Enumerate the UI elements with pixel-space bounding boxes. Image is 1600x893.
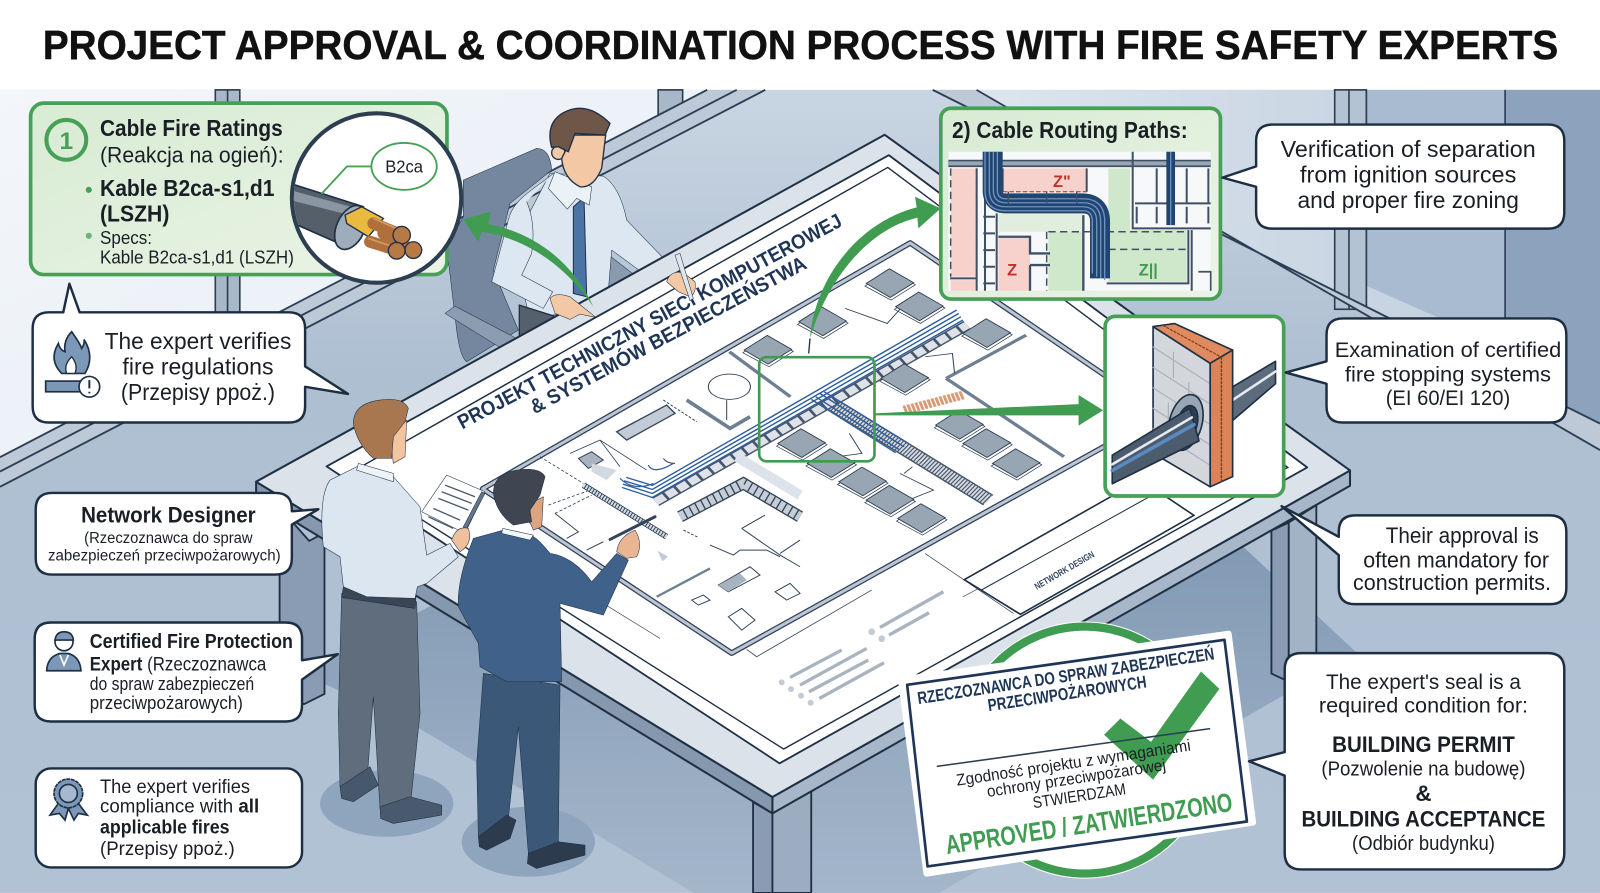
callout: seal required: (Pozwolenie na budowę) — [1321, 759, 1526, 781]
callout: examination of fire stopping — [1286, 318, 1566, 423]
panel: cable routing paths: 2) Cable Routing Paths: — [952, 117, 1188, 143]
lower legend bars — [747, 590, 943, 706]
callout text — [100, 776, 259, 860]
tie — [573, 197, 587, 297]
callout: verification of separation: Verification of separation — [1281, 136, 1536, 162]
cable ratings text: Specs: — [100, 227, 152, 248]
callout: network designer — [36, 493, 318, 575]
callout: seal required: required condition for: — [1319, 693, 1528, 717]
callout text: (Przepisy ppoż.) — [100, 838, 235, 860]
check mark — [1104, 672, 1219, 780]
shirt torso — [510, 173, 672, 320]
cable ratings text — [86, 115, 294, 267]
callout: expert verifies compliance — [36, 768, 302, 867]
callout: verification of separation: from ignition sources — [1300, 162, 1516, 188]
stamp text: APPROVED / ZATWIERDZONO — [943, 787, 1234, 860]
shirt left arm — [492, 173, 553, 308]
stamp text — [916, 643, 1234, 860]
table top — [256, 135, 1350, 813]
label: B2ca: B2ca — [385, 157, 423, 177]
seated man and chair — [445, 108, 672, 362]
callout: approval mandatory: often mandatory for — [1363, 547, 1549, 572]
callout: approval mandatory: construction permits. — [1353, 570, 1551, 595]
stamp text: Zgodność projektu z wymaganiami — [955, 737, 1192, 790]
title block — [964, 480, 1194, 614]
callout: examination of fire stopping: (EI 60/EI 120) — [1386, 386, 1510, 410]
callout: seal required: & — [1415, 781, 1432, 806]
callout text: Certified Fire Protection — [90, 631, 293, 653]
icon: expert in hard hat — [47, 632, 81, 671]
chair — [445, 148, 637, 362]
standing men — [320, 399, 655, 877]
callout text: do spraw zabezpieczeń — [90, 673, 254, 694]
title band — [0, 0, 1600, 90]
icon: cable magnifier — [290, 113, 461, 283]
cable ratings text: Kable B2ca-s1,d1 — [100, 175, 275, 201]
callout: approval mandatory: Their approval is — [1386, 523, 1539, 548]
callout text — [90, 631, 293, 713]
callout text: The expert verifies — [105, 328, 291, 354]
zone labels: Z" — [1053, 173, 1071, 191]
callout text — [105, 328, 291, 405]
zone labels: Z — [1007, 262, 1017, 280]
callout: verification of separation — [1222, 125, 1564, 229]
callout: verification of separation: and proper fire zoning — [1297, 187, 1519, 213]
workstations — [743, 269, 1042, 535]
floor plan frame — [483, 243, 1162, 653]
callout: examination of fire stopping: Examination of certified — [1335, 338, 1561, 362]
callout text: applicable fires — [100, 817, 230, 839]
callout: network designer: (Rzeczoznawca do spraw — [84, 530, 253, 547]
panel: cable fire ratings — [31, 103, 447, 275]
callout: seal required — [1249, 653, 1564, 869]
approval stamp — [901, 624, 1253, 877]
callout: seal required: BUILDING ACCEPTANCE — [1302, 807, 1545, 832]
title block: NETWORK DESIGN — [1033, 549, 1096, 592]
man in suit — [458, 469, 655, 868]
zone labels: Z|| — [1139, 262, 1158, 280]
callout: approval mandatory — [1282, 506, 1566, 604]
icon: medal — [50, 779, 87, 820]
callout text: Expert (Rzeczoznawca — [90, 653, 267, 675]
callout text: compliance with all — [100, 795, 259, 817]
cable ratings text: (Reakcja na ogień): — [100, 142, 284, 167]
stamp text: RZECZOZNAWCA DO SPRAW ZABEZPIECZEŃ — [916, 643, 1216, 708]
callout: network designer: Network Designer — [81, 503, 256, 528]
cable ratings text: Cable Fire Ratings — [100, 115, 283, 141]
hair and face — [550, 108, 610, 187]
arrow: plan to fire stopping — [874, 395, 1103, 426]
trousers — [519, 305, 558, 337]
cable ratings text: Kable B2ca-s1,d1 (LSZH) — [100, 246, 294, 267]
floor shadows — [320, 770, 595, 877]
blueprint title: PROJEKT TECHNICZNY SIECI KOMPUTEROWEJ — [454, 210, 846, 434]
callout: expert verifies fire regulations — [33, 284, 348, 423]
zone labels — [1007, 173, 1158, 280]
callout: examination of fire stopping: fire stopping systems — [1345, 363, 1551, 387]
blueprint title: & SYSTEMÓW BEZPIECZEŃSTWA — [526, 251, 811, 419]
table legs — [280, 505, 1316, 893]
cable trays — [622, 310, 988, 502]
callout text: fire regulations — [122, 354, 273, 380]
arrow: plan to routing paths — [809, 197, 941, 353]
step number 1 — [46, 120, 86, 160]
callout text: The expert verifies — [100, 776, 250, 798]
callout: certified fire protection expert — [35, 623, 338, 722]
panel: fire stopping detail — [1105, 316, 1284, 496]
man in shirt — [322, 399, 485, 823]
panel: cable routing paths — [941, 108, 1220, 299]
floor plan right side — [622, 269, 1077, 613]
blueprint sheet — [327, 155, 1307, 763]
callout: seal required: (Odbiór budynku) — [1352, 833, 1495, 855]
icon: flame and warning — [46, 332, 100, 397]
stamp text: PRZECIWPOŻAROWYCH — [986, 672, 1148, 715]
step number 1: 1 — [60, 128, 73, 155]
callout: seal required: The expert's seal is a — [1326, 670, 1521, 694]
stamp text: ochrony przeciwpożarowej — [986, 756, 1167, 801]
stamp text: STWIERDZAM — [1032, 780, 1127, 812]
floor plan left side — [540, 400, 800, 638]
seated man hands and pen — [550, 253, 695, 319]
icon: cable through wall — [1112, 324, 1276, 487]
green selection square — [759, 357, 874, 461]
arrow: seated man to cable detail — [463, 212, 593, 307]
callout text: (Przepisy ppoż.) — [121, 379, 275, 405]
title: PROJECT APPROVAL & COORDINATION PROCESS WITH FIRE SAFETY EXPERTS — [43, 22, 1558, 68]
collar — [548, 172, 592, 209]
callout: seal required: BUILDING PERMIT — [1332, 732, 1515, 757]
cable ratings text: (LSZH) — [100, 201, 169, 227]
callout text: przeciwpożarowych) — [90, 692, 243, 713]
routing plan — [948, 152, 1211, 291]
callout: network designer: zabezpieczeń przeciwpożarowych) — [48, 547, 281, 564]
label: B2ca — [371, 143, 437, 190]
